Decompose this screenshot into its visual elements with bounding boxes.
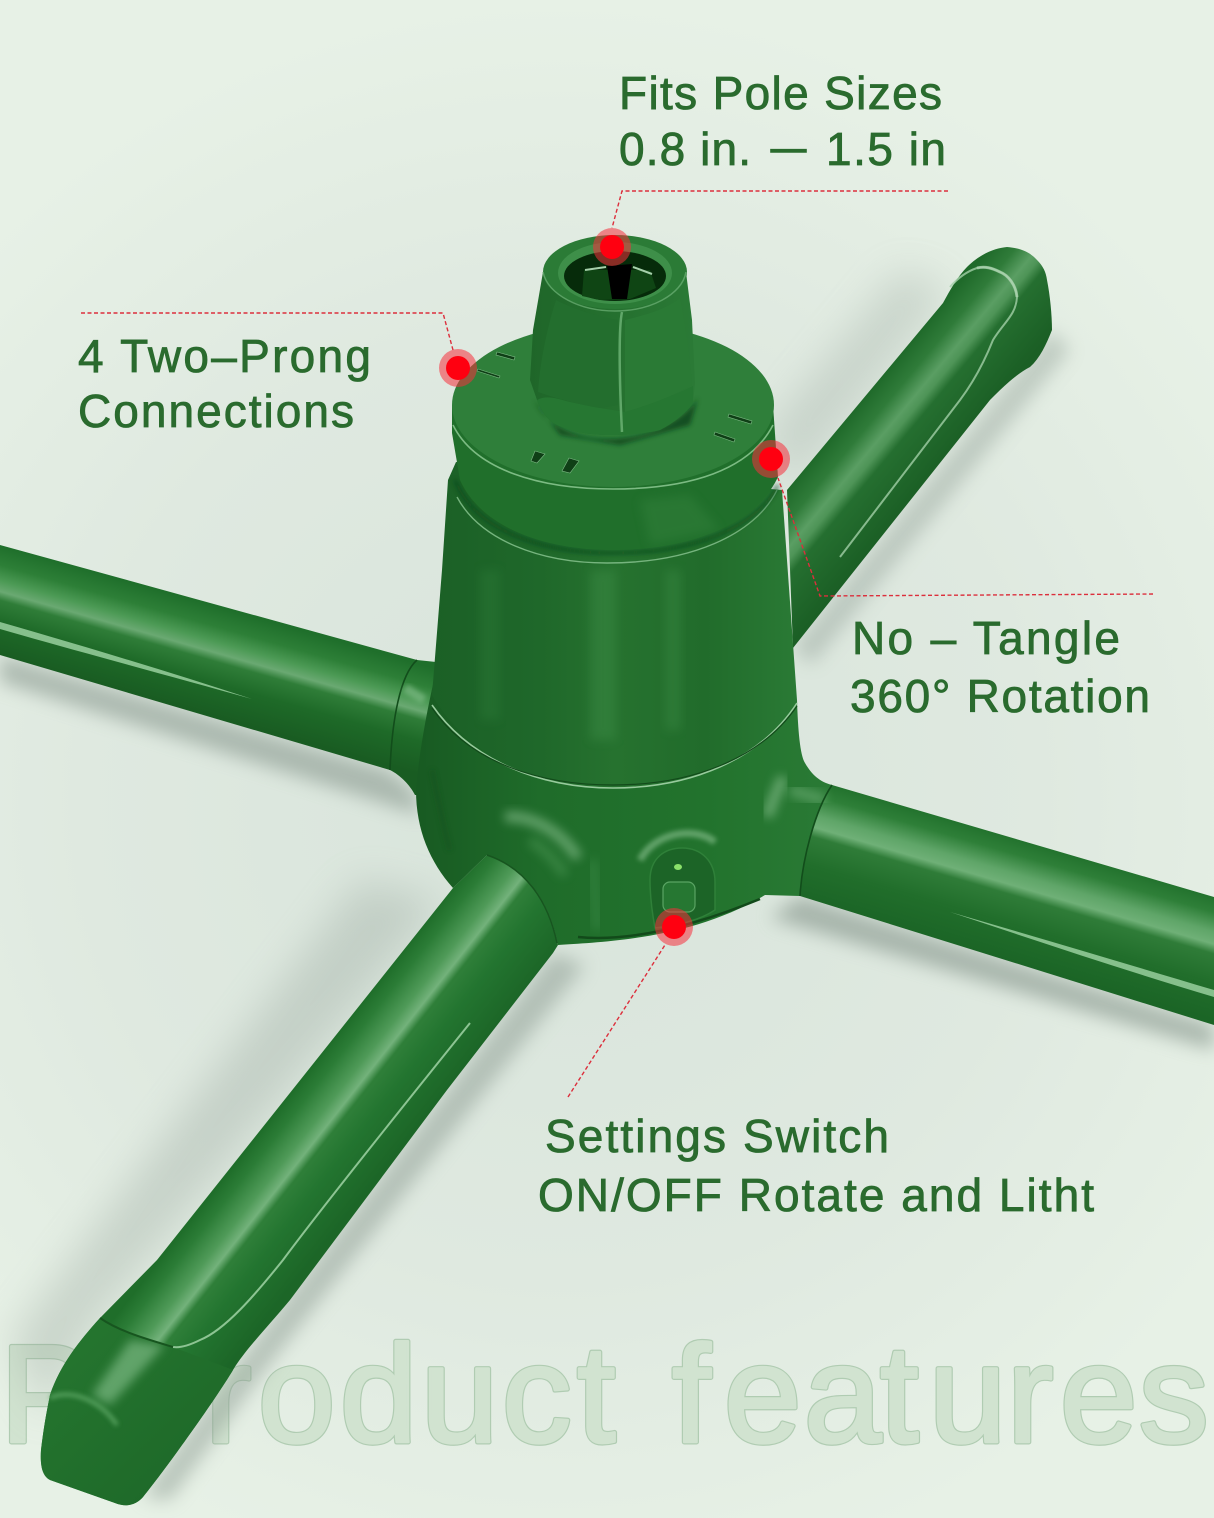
callout: pole sizes: 0.8 in. — [619, 123, 751, 175]
callout: pole sizes — [593, 67, 948, 266]
knob — [530, 235, 695, 435]
callout: pole sizes: 1.5 in — [826, 123, 946, 175]
callout: settings switch: ON/OFF Rotate and Litht — [538, 1169, 1094, 1221]
callout: rotation — [752, 440, 1153, 722]
callout: pole sizes: Fits Pole Sizes — [619, 67, 942, 119]
leg: front left — [41, 855, 558, 1505]
callout: two-prong connections: Connections — [78, 385, 354, 437]
watermark heading: Product features — [0, 1317, 1208, 1472]
callout: rotation: 360° Rotation — [850, 670, 1150, 722]
callout: rotation: No – Tangle — [852, 612, 1120, 664]
cone body — [432, 462, 797, 788]
watermark heading: Product features — [0, 1317, 1208, 1472]
callout: settings switch: Settings Switch — [545, 1110, 889, 1162]
callout: two-prong connections: 4 Two–Prong — [78, 330, 371, 382]
top disc — [452, 323, 778, 550]
switch button — [640, 833, 715, 928]
hub base — [416, 680, 832, 945]
knob shadow on disc — [534, 398, 698, 445]
outlet slots — [477, 352, 752, 473]
callout: two-prong connections — [78, 313, 477, 437]
leg: left — [0, 545, 436, 795]
leg: right front — [780, 780, 1214, 1025]
callout: pole sizes: — — [771, 129, 806, 168]
callout: settings switch — [538, 908, 1094, 1221]
leg: back right — [787, 247, 1052, 648]
